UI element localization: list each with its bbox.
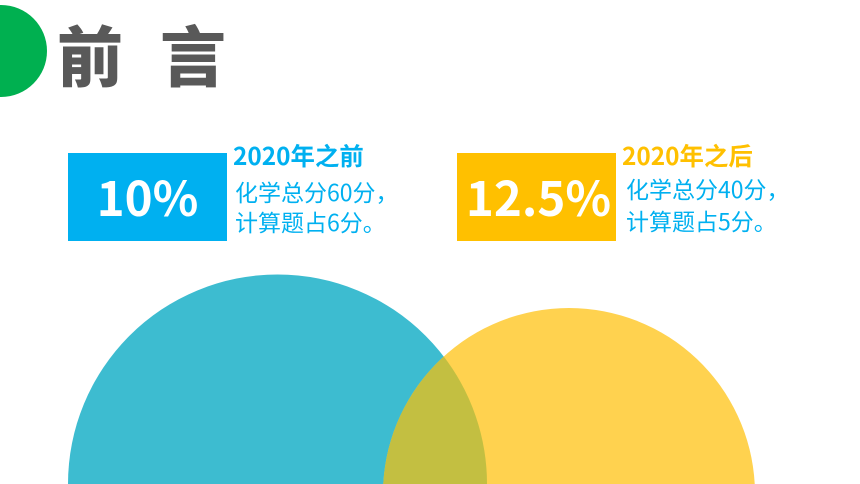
text block: after 2020: 化学总分40分， — [626, 171, 790, 205]
title: 前 — [57, 5, 123, 101]
title — [57, 5, 226, 101]
text block: before 2020: 化学总分60分， — [235, 174, 399, 208]
panel: 12.5% box: 12.5% — [466, 161, 611, 230]
text block: after 2020: 计算题占5分。 — [626, 203, 777, 237]
circle: teal — [68, 275, 487, 484]
overlap — [383, 357, 487, 484]
text block: before 2020 — [235, 174, 399, 238]
heading: after 2020: 2020年之后 — [622, 138, 753, 173]
panel: 10% box — [68, 153, 227, 241]
text block: after 2020 — [626, 171, 790, 237]
panel: 10% box: 10% — [97, 161, 198, 230]
text block: before 2020: 计算题占6分。 — [235, 204, 386, 238]
heading: before 2020: 2020年之前 — [233, 138, 364, 173]
icon: green circle — [0, 5, 47, 97]
title: 言 — [160, 5, 226, 101]
circle: yellow — [383, 308, 755, 484]
